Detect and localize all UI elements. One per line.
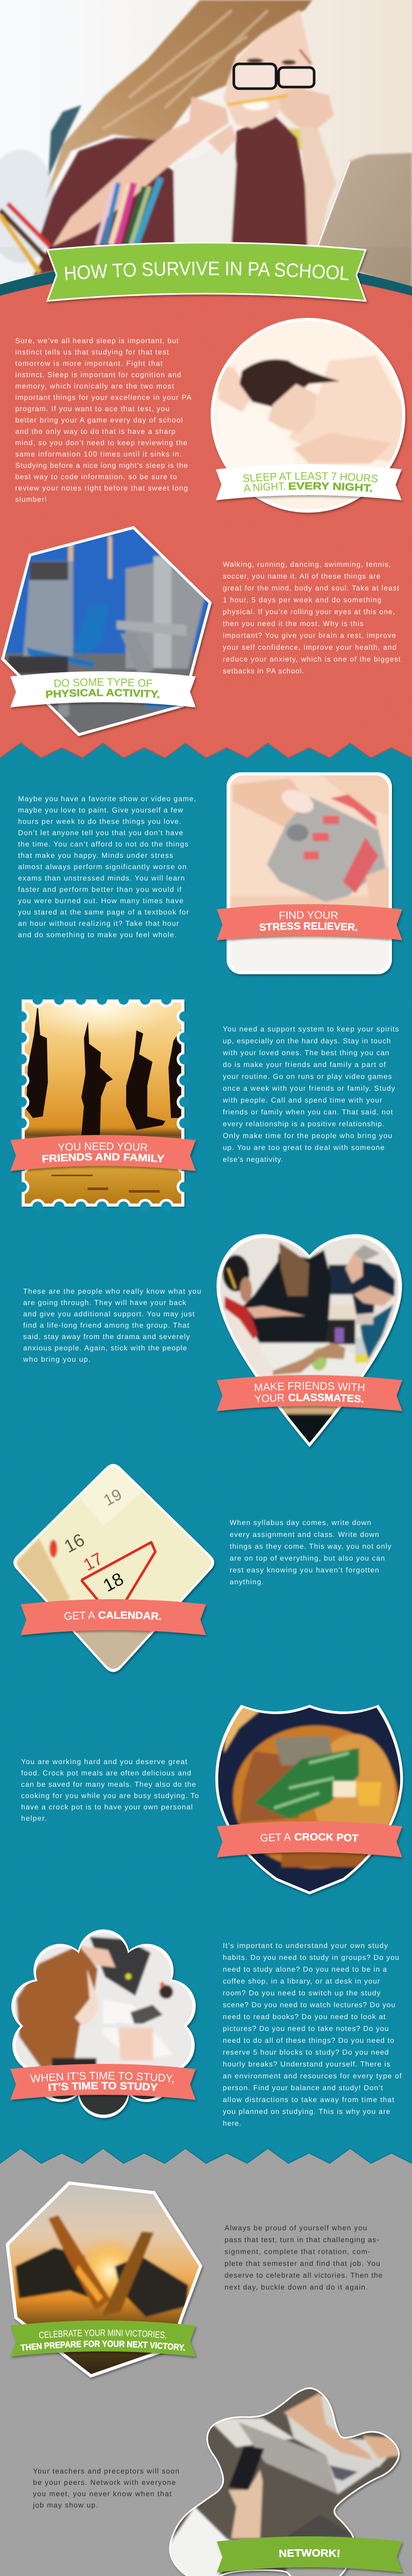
- text block: stress reliever: you were burned out. How many times have: [18, 896, 183, 905]
- text block: study: room? Do you need to switch up the study: [223, 1989, 381, 1997]
- ribbon: sleep: [216, 464, 402, 500]
- text block: celebrate: deserve to celebrate all victories. Then the: [225, 2271, 383, 2279]
- text block: sleep: Sure, we’ve all heard sleep is important, but: [15, 336, 179, 345]
- text block: sleep: review your notes right before that sweet long: [15, 484, 188, 492]
- text block: friends and family: with your loved ones. The best thing you can: [222, 1048, 389, 1057]
- text block: network: be your peers. Network with everyone: [33, 2478, 176, 2486]
- grey section background: [0, 2149, 412, 2576]
- text block: friends and family: do is make your friends and family a part of: [223, 1060, 386, 1069]
- ribbon: classmates: CLASSMATES.: [288, 1392, 365, 1405]
- text block: study: person. Find your balance and study! Don’t: [223, 2083, 383, 2092]
- text block: calendar: rest easy knowing you haven’t forgotten: [230, 1566, 379, 1574]
- text block: celebrate: signment, complete that rotation, com-: [225, 2247, 370, 2256]
- panel: calendar diamond photo: [11, 1461, 216, 1676]
- text block: physical activity: Walking, running, dancing, swimming, tennis,: [223, 560, 391, 568]
- text block: study: an environment and resources for every type of: [223, 2072, 402, 2080]
- text block: classmates: find a life-long friend among the group. That: [23, 1321, 190, 1329]
- text block: friends and family: once a week with your friends or family. Study: [223, 1084, 395, 1092]
- text block: stress reliever: exams than unstressed minds. You will learn: [18, 874, 184, 882]
- panel: crock pot shield photo: [214, 1703, 406, 1895]
- photo: woman with a pen: [11, 1930, 197, 2119]
- ribbon: friends and family: [10, 1135, 196, 1171]
- ribbon: study: IT’S TIME TO STUDY: [48, 2080, 158, 2093]
- text block: sleep: same information 100 times until it sinks in.: [15, 450, 182, 458]
- text block: stress reliever: faster and perform better than you would if: [18, 885, 181, 893]
- text block: study: coffee shop, in a library, or at desk in your: [223, 1977, 380, 1985]
- text block: network: you meet, you never know when that: [33, 2489, 171, 2498]
- ribbon: calendar: [21, 1599, 206, 1635]
- text block: classmates: These are the people who really know what you: [23, 1287, 201, 1295]
- text block: crock pot: food. Crock pot meals are often delicious and: [21, 1769, 191, 1777]
- text block: physical activity: physical. If you’re rolling your eyes at this one,: [223, 607, 395, 616]
- photo: students around a table: [217, 1235, 401, 1449]
- text block: sleep: instinct tells us that studying for that test: [15, 348, 169, 356]
- text block: study: habits. Do you need to study in groups? Do you: [223, 1953, 399, 1961]
- text block: study: pictures? Do you need to take notes? Do you: [223, 2024, 389, 2032]
- text block: sleep: better bring your A game every day of school: [15, 416, 183, 424]
- text block: stress reliever: an hour without realizing it? Take that hour: [18, 919, 179, 927]
- text block: network: [32, 2467, 179, 2509]
- panel: stress reliever photo: [217, 772, 404, 977]
- panel: classmates heart photo: [216, 1234, 404, 1449]
- text block: classmates: and give you additional support. You may just: [23, 1310, 195, 1318]
- text block: sleep: best way to code information, so be sure to: [15, 472, 177, 481]
- ribbon: crock pot: [217, 1821, 402, 1857]
- text block: study: need to study alone? Do you need to be in a: [223, 1965, 387, 1973]
- photo: stew in a dark bowl: [214, 1703, 406, 1895]
- text block: physical activity: soccer, you name it. All of these things are: [223, 572, 381, 580]
- text block: study: allow distractions to take away from time that: [223, 2095, 394, 2104]
- panel: study flower photo: [10, 1929, 197, 2119]
- title ribbon: [47, 243, 366, 301]
- text block: classmates: are going through. They will have your back: [23, 1298, 186, 1307]
- text block: calendar: [230, 1518, 391, 1586]
- text block: sleep: tomorrow is more important. Fight that: [15, 359, 163, 367]
- text block: network: Your teachers and preceptors will soon: [33, 2467, 179, 2475]
- ribbon: friends and family: FRIENDS AND FAMILY: [42, 1151, 165, 1165]
- text block: calendar: are on top of everything, but also you can: [230, 1554, 385, 1562]
- ribbon: classmates: MAKE FRIENDS WITH: [254, 1380, 366, 1394]
- text block: celebrate: plete that semester and find that job. You: [225, 2259, 380, 2267]
- text block: crock pot: You are working hard and you deserve great: [21, 1757, 187, 1766]
- text block: sleep: mind, so you don’t need to keep reviewing the: [15, 438, 187, 447]
- text block: study: [223, 1941, 402, 2127]
- text block: friends and family: up, especially on the hard days. Stay in touch: [223, 1037, 391, 1045]
- photo: calendar with red marker: [11, 1461, 216, 1676]
- ribbon: stress reliever: [217, 904, 402, 940]
- text block: friends and family: [222, 1025, 399, 1163]
- text block: study: hourly breaks? Understand yourself. There is: [223, 2060, 390, 2068]
- text block: stress reliever: you stared at the same page of a textbook for: [18, 908, 189, 916]
- text block: classmates: anxious people. Again, stick with the people: [23, 1344, 187, 1352]
- text block: study: you planned on studying. This is why you are: [223, 2107, 390, 2115]
- text block: crock pot: cooking for you while you are busy studying. To: [21, 1791, 199, 1800]
- photo: sleeping woman: [214, 321, 402, 510]
- ribbon: classmates: YOUR: [254, 1392, 285, 1405]
- ribbon: celebrate: CELEBRATE YOUR MINI VICTORIES,: [39, 2328, 167, 2341]
- text block: physical activity: important? You give your brain a rest, improve: [223, 631, 396, 639]
- text block: friends and family: You need a support system to keep your spirits: [223, 1025, 399, 1033]
- text block: crock pot: [21, 1757, 199, 1822]
- ribbon: physical activity: [10, 671, 196, 707]
- text block: classmates: [23, 1287, 201, 1363]
- text block: study: here.: [223, 2119, 241, 2127]
- ribbon: friends and family: YOU NEED YOUR: [58, 1141, 148, 1154]
- text block: physical activity: setbacks in PA school.: [223, 667, 304, 675]
- ribbon: sleep: EVERY NIGHT.: [288, 482, 372, 492]
- panel: sleep photo: [210, 318, 408, 515]
- text block: crock pot: helper.: [21, 1814, 47, 1822]
- text block: stress reliever: the time. You can’t afford to not do the things: [18, 840, 188, 848]
- ribbon: stress reliever: FIND YOUR: [279, 911, 338, 919]
- text block: study: need to read books? Do you need to look at: [223, 2012, 386, 2021]
- text block: sleep: and the only way to do that is have a sharp: [15, 427, 176, 435]
- panel: celebrate polygon photo: [4, 2181, 202, 2378]
- text block: friends and family: with people. Call and spend time with your: [222, 1096, 382, 1104]
- ribbon: calendar: GET A: [64, 1609, 95, 1622]
- text block: calendar: things as they come. This way, you not only: [230, 1542, 391, 1550]
- text block: classmates: said, stay away from the drama and severely: [23, 1332, 190, 1341]
- photo: bottles toasting at sunset: [4, 2183, 202, 2377]
- text block: physical activity: [223, 560, 401, 675]
- photo: calendar with red marker: 17: [80, 1549, 106, 1575]
- photo: calendar with red marker: 19: [100, 1485, 125, 1510]
- text block: stress reliever: maybe you love to paint. Give yourself a few: [18, 806, 183, 814]
- text block: stress reliever: that make you happy. Minds under stress: [18, 851, 173, 859]
- text block: classmates: who bring you up.: [23, 1355, 91, 1363]
- text block: sleep: Studying before a nice long night’s sleep is the: [15, 461, 188, 469]
- text block: study: scene? Do you need to watch lectures? Do you: [223, 2001, 395, 2009]
- ribbon: classmates: [217, 1375, 402, 1411]
- ribbon: celebrate: [10, 2320, 196, 2357]
- text block: stress reliever: hours per week to do these things you love.: [18, 817, 181, 825]
- teal section background: [0, 743, 412, 2215]
- ribbon: calendar: CALENDAR.: [98, 1609, 162, 1622]
- title: HOW TO SURVIVE IN PA SCHOOL: [65, 262, 348, 280]
- ribbon: crock pot: CROCK POT: [294, 1832, 359, 1844]
- text block: stress reliever: almost always perform significantly worse on: [18, 862, 186, 871]
- text block: friends and family: friends or family when you can. That said, not: [223, 1108, 393, 1116]
- text block: physical activity: then you need it the most. Why is this: [223, 619, 364, 628]
- text block: friends and family: Only make time for the people who bring you: [223, 1131, 392, 1140]
- text block: celebrate: next day, buckle down and do it again.: [225, 2283, 368, 2291]
- photo: silhouettes jumping at sunset: [25, 1003, 181, 1204]
- text block: sleep: slumber!: [15, 495, 47, 503]
- text block: sleep: program. If you want to ace that test, you: [15, 404, 169, 413]
- photo: fidget cube in hand: [230, 773, 391, 974]
- text block: friends and family: else’s negativity.: [223, 1155, 283, 1163]
- ribbon: crock pot: GET A: [260, 1831, 291, 1844]
- ribbon: network: [217, 2536, 402, 2572]
- text block: sleep: instinct. Sleep is important for cognition and: [15, 370, 181, 379]
- ribbon: sleep: A NIGHT.: [244, 482, 285, 492]
- photo: calendar with red marker: 16: [61, 1529, 88, 1557]
- coral section background: [0, 268, 412, 762]
- text block: sleep: important things for your excellence in your PA: [15, 393, 192, 401]
- panel: physical activity photo: [1, 526, 214, 739]
- text block: friends and family: up. You are too great to deal with someone: [223, 1143, 385, 1151]
- text block: crock pot: can be saved for many meals. They also do the: [21, 1780, 196, 1788]
- ribbon: physical activity: DO SOME TYPE OF: [55, 678, 152, 687]
- text block: celebrate: Always be proud of yourself when you: [225, 2224, 367, 2232]
- ribbon: study: [10, 2064, 196, 2100]
- text block: study: It’s important to understand your own study: [223, 1941, 388, 1950]
- text block: network: job may show up.: [32, 2501, 98, 2509]
- text block: stress reliever: [18, 794, 196, 939]
- text block: physical activity: reduce your anxiety, which is one of the biggest: [223, 655, 401, 663]
- hero photo: student biting a pencil: [0, 0, 412, 309]
- text block: calendar: anything.: [230, 1578, 264, 1586]
- text block: physical activity: your self confidence, improve your health, and: [223, 643, 397, 651]
- text block: celebrate: [225, 2224, 383, 2291]
- text block: sleep: memory, which ironically are the two most: [15, 382, 174, 390]
- text block: stress reliever: Maybe you have a favorite show or video game,: [18, 794, 196, 803]
- text block: calendar: every assignment and class. Write down: [230, 1530, 379, 1538]
- text block: crock pot: have a crock pot is to have your own personal: [21, 1803, 193, 1811]
- text block: celebrate: pass that test, turn in that challenging as-: [225, 2235, 379, 2244]
- text block: physical activity: 1 hour, 5 days per week and do something: [223, 596, 382, 604]
- text block: study: reserve 5 hour blocks to study? Do you need: [223, 2048, 389, 2056]
- ribbon: celebrate: THEN PREPARE FOR YOUR NEXT VICTORY.: [20, 2339, 186, 2353]
- ribbon: physical activity: PHYSICAL ACTIVITY.: [46, 689, 160, 698]
- photo: phone and laptop on a table: [167, 2385, 404, 2576]
- text block: stress reliever: Don’t let anyone tell you that you don’t have: [18, 828, 183, 837]
- panel: friends and family stamp: [10, 994, 198, 1212]
- panel: network blob photo: [167, 2385, 404, 2576]
- text block: study: need to do all of these things? Do you need to: [223, 2036, 394, 2044]
- text block: friends and family: your routine. Go on runs or play video games: [223, 1072, 392, 1080]
- photo: gym machines: [3, 526, 211, 739]
- ribbon: sleep: SLEEP AT LEAST 7 HOURS: [243, 472, 378, 482]
- text block: physical activity: great for the mind, body and soul. Take at least: [223, 584, 399, 592]
- photo: calendar with red marker: 18: [99, 1568, 127, 1596]
- ribbon: study: WHEN IT’S TIME TO STUDY,: [30, 2070, 175, 2085]
- curved band under hero: [0, 256, 412, 309]
- text block: friends and family: every relationship is a positive relationship.: [223, 1120, 384, 1128]
- ribbon: stress reliever: STRESS RELIEVER.: [260, 922, 357, 931]
- ribbon: network: NETWORK!: [279, 2548, 340, 2560]
- text block: stress reliever: and do something to make you feel whole.: [18, 930, 177, 939]
- text block: sleep: [15, 336, 192, 503]
- text block: calendar: When syllabus day comes, write down: [230, 1518, 371, 1527]
